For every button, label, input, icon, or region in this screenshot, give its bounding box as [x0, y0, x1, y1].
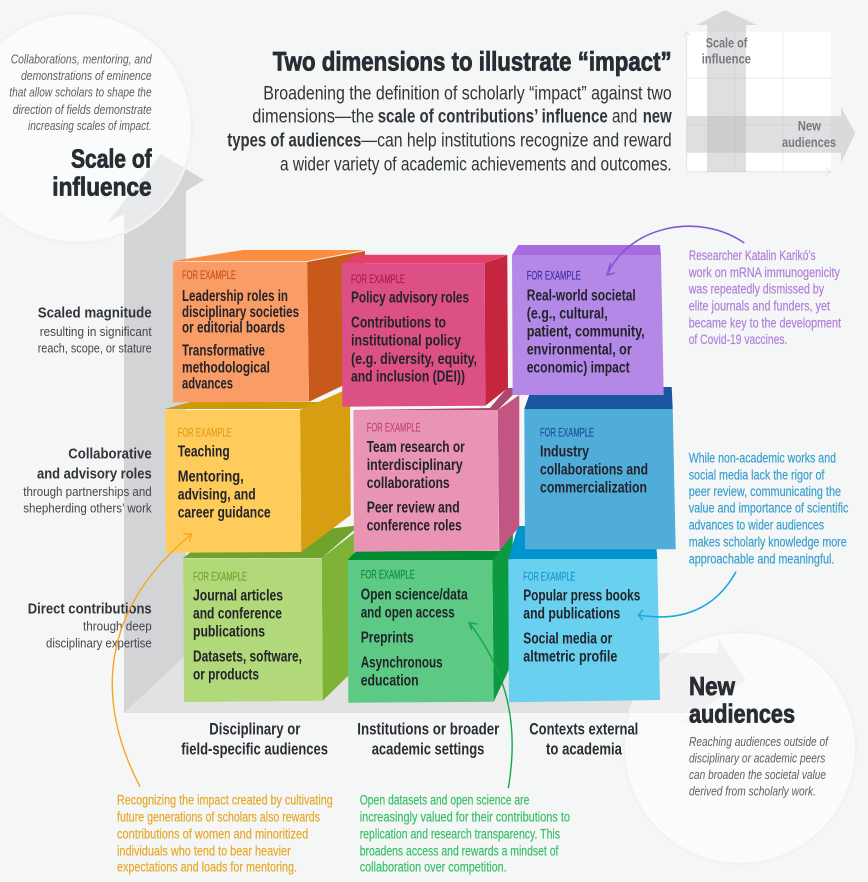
block: institutional collaborative roles: collaborations	[367, 475, 450, 492]
intro paragraph	[227, 83, 672, 176]
column label: disciplinary audiences: Disciplinary or	[209, 720, 301, 738]
column label: disciplinary audiences	[181, 720, 328, 758]
block: disciplinary direct contributions: and conference	[193, 606, 282, 623]
block: external collaborative roles	[524, 387, 676, 549]
block: disciplinary scaled magnitude: Leadership roles in	[182, 288, 288, 305]
mini diagram: two axes	[683, 10, 855, 175]
block: external scaled magnitude: environmental, or	[527, 342, 632, 359]
scale of influence description: increasing scales of impact.	[28, 119, 152, 133]
row label: scaled magnitude	[38, 305, 152, 356]
row label: scaled magnitude: resulting in significant	[40, 324, 152, 339]
block: external scaled magnitude: FOR EXAMPLE	[527, 270, 581, 282]
block: external direct contributions: Popular press books	[523, 588, 640, 605]
block: institutional collaborative roles: interdisciplinary	[367, 457, 463, 474]
mini diagram: two axes: audiences	[782, 134, 836, 150]
block: disciplinary direct contributions: or products	[193, 667, 259, 684]
column label: disciplinary audiences: field-specific audiences	[181, 740, 328, 758]
block: disciplinary scaled magnitude: methodological	[182, 359, 270, 376]
block: external collaborative roles: FOR EXAMPLE	[540, 428, 594, 440]
block: institutional direct contributions: FOR EXAMPLE	[361, 570, 415, 582]
row label: collaborative and advisory roles	[23, 445, 152, 516]
block: institutional direct contributions: and open access	[361, 605, 455, 622]
heading: new audiences: New	[689, 671, 736, 701]
annotation: Karikó	[688, 248, 841, 347]
title: Two dimensions to illustrate “impact”	[273, 47, 672, 77]
annotation: Karikó: elite journals and funders, yet	[689, 299, 830, 314]
block: institutional collaborative roles: FOR EXAMPLE	[367, 423, 421, 435]
block: disciplinary scaled magnitude	[173, 250, 365, 402]
intro paragraph: dimensions—the	[252, 107, 374, 128]
block: disciplinary scaled magnitude: or editorial boards	[182, 320, 285, 337]
block: external direct contributions: and publications	[523, 606, 620, 623]
intro paragraph: —can help institutions recognize and reward	[361, 131, 672, 152]
row label: collaborative and advisory roles: through partnerships and	[23, 484, 152, 499]
horizontal axis arrow: new audiences	[124, 640, 746, 726]
block: institutional collaborative roles: Team research or	[367, 439, 465, 456]
heading: new audiences: audiences	[689, 699, 795, 729]
block: external direct contributions: Social media or	[523, 631, 612, 648]
block: disciplinary collaborative roles: career guidance	[178, 505, 271, 522]
block: external scaled magnitude	[512, 245, 664, 395]
block: disciplinary scaled magnitude: Transformative	[182, 343, 265, 360]
scale of influence description: demonstrations of eminence	[21, 69, 152, 83]
arrow: blue annotation to popular press block	[638, 572, 736, 620]
block: disciplinary collaborative roles: FOR EXAMPLE	[178, 428, 232, 440]
vertical axis arrow: scale of influence	[107, 154, 204, 713]
heading: scale of influence: influence	[52, 172, 152, 202]
annotation: mentoring: expectations and loads for mentoring.	[117, 860, 297, 875]
intro paragraph: a wider variety of academic achievements and outcomes.	[280, 155, 672, 176]
annotation: mentoring	[117, 793, 333, 875]
new audiences description: derived from scholarly work.	[689, 785, 816, 799]
circle: new audiences backdrop	[624, 632, 856, 864]
scale of influence description: that allow scholars to shape the	[9, 86, 152, 100]
circle: scale of influence backdrop	[0, 13, 192, 243]
mini diagram: two axes: influence	[702, 50, 751, 66]
block: disciplinary collaborative roles	[165, 388, 351, 553]
block: institutional direct contributions: Asynchronous	[361, 655, 443, 672]
column label: institutions: academic settings	[372, 740, 484, 758]
block: institutional scaled magnitude	[342, 255, 508, 407]
row label: collaborative and advisory roles: shepherding others’ work	[23, 501, 152, 516]
block: disciplinary direct contributions: Datasets, software,	[193, 649, 302, 666]
block: disciplinary collaborative roles: Mentoring,	[178, 469, 244, 486]
block: institutional direct contributions: Open science/data	[361, 587, 468, 604]
block: institutional collaborative roles: conference roles	[367, 518, 462, 535]
annotation: open science: Open datasets and open science are	[360, 793, 529, 808]
intro paragraph: and	[612, 107, 637, 128]
block: external direct contributions: FOR EXAMPLE	[523, 572, 575, 584]
row label: scaled magnitude: reach, scope, or stature	[38, 341, 152, 356]
annotation: open science: collaboration over competition.	[360, 860, 507, 875]
annotation: Karikó: of Covid-19 vaccines.	[689, 332, 787, 347]
block: external scaled magnitude: economic) impact	[527, 360, 630, 377]
block: external collaborative roles: commercialization	[540, 480, 647, 497]
new audiences description	[689, 735, 829, 799]
arrow: purple annotation to real-world block	[607, 226, 744, 275]
annotation: mentoring: future generations of scholars also rewards	[117, 810, 320, 825]
block: disciplinary direct contributions: publications	[193, 624, 265, 641]
annotation: open science: increasingly valued for their contributions to	[360, 810, 570, 825]
intro paragraph: Broadening the definition of scholarly “impact” against two	[263, 83, 672, 104]
row label: direct contributions: through deep	[83, 619, 152, 634]
block: disciplinary scaled magnitude: disciplinary societies	[182, 304, 299, 321]
block: disciplinary direct contributions	[183, 525, 360, 702]
intro paragraph: types of audiences	[227, 131, 361, 152]
block: institutional scaled magnitude: Policy advisory roles	[351, 290, 469, 307]
block: external scaled magnitude: (e.g., cultural,	[527, 306, 608, 323]
column label: institutions	[357, 720, 500, 758]
annotation: non-academic works: social media lack the rigor of	[689, 468, 825, 483]
block: external collaborative roles: collaborations and	[540, 462, 648, 479]
row label: scaled magnitude: Scaled magnitude	[38, 305, 152, 322]
mini diagram: two axes: New	[798, 118, 821, 134]
block: institutional direct contributions	[348, 533, 513, 703]
annotation: open science: broadens access and rewards a mindset of	[360, 843, 559, 858]
block: external scaled magnitude: Real-world societal	[527, 288, 636, 305]
block: external collaborative roles: Industry	[540, 444, 589, 461]
block: disciplinary scaled magnitude: FOR EXAMPLE	[182, 270, 236, 282]
new audiences description: Reaching audiences outside of	[689, 735, 829, 749]
intro paragraph: scale of contributions’ influence	[378, 107, 608, 128]
block: disciplinary collaborative roles: advising, and	[178, 487, 256, 504]
row label: collaborative and advisory roles: and advisory roles	[37, 466, 152, 483]
annotation: mentoring: individuals who tend to bear heavier	[117, 843, 291, 858]
annotation: open science	[360, 793, 570, 875]
heading: new audiences	[689, 671, 795, 729]
annotation: non-academic works	[689, 451, 849, 566]
block: institutional scaled magnitude: and inclusion (DEI))	[351, 369, 465, 386]
block: disciplinary direct contributions: FOR EXAMPLE	[193, 572, 247, 584]
annotation: non-academic works: approachable and meaningful.	[689, 551, 834, 566]
annotation: non-academic works: advances to wider audiences	[689, 518, 824, 533]
intro paragraph: new	[643, 107, 672, 128]
block: disciplinary collaborative roles: Teaching	[178, 444, 230, 461]
annotation: Karikó: Researcher Katalin Karikó’s	[689, 248, 816, 263]
annotation: Karikó: was repeatedly dismissed by	[688, 282, 824, 297]
block: institutional scaled magnitude: institutional policy	[351, 333, 461, 350]
block: institutional collaborative roles: Peer review and	[367, 500, 460, 517]
arrow: orange annotation to teaching block	[112, 534, 192, 787]
annotation: mentoring: Recognizing the impact created by cultivating	[117, 793, 333, 808]
block: institutional direct contributions: Preprints	[361, 630, 414, 647]
scale of influence description: direction of fields demonstrate	[13, 103, 152, 117]
block: institutional direct contributions: education	[361, 673, 419, 690]
block: institutional collaborative roles	[353, 388, 519, 552]
column label: external contexts: to academia	[546, 740, 623, 758]
block: external direct contributions	[508, 526, 660, 702]
block: external direct contributions: altmetric profile	[523, 649, 618, 666]
scale of influence description	[9, 52, 153, 133]
block: institutional scaled magnitude: Contributions to	[351, 315, 446, 332]
heading: scale of influence	[52, 144, 152, 202]
block: disciplinary scaled magnitude: advances	[182, 376, 233, 393]
block: institutional scaled magnitude: FOR EXAMPLE	[351, 274, 405, 286]
new audiences description: can broaden the societal value	[689, 768, 826, 782]
new audiences description: disciplinary or academic peers	[689, 751, 825, 765]
block: disciplinary direct contributions: Journal articles	[193, 588, 283, 605]
heading: scale of influence: Scale of	[71, 144, 152, 174]
arrow: green annotation to open science block	[469, 623, 512, 788]
block: institutional scaled magnitude: (e.g. diversity, equity,	[351, 351, 477, 368]
mini diagram: two axes: Scale of	[706, 34, 748, 50]
annotation: mentoring: contributions of women and minoritized	[117, 827, 308, 842]
row label: collaborative and advisory roles: Collaborative	[68, 445, 152, 462]
scale of influence description: Collaborations, mentoring, and	[11, 52, 153, 66]
column label: external contexts	[529, 720, 638, 758]
row label: direct contributions	[28, 600, 152, 650]
column label: institutions: Institutions or broader	[357, 720, 500, 738]
column label: external contexts: Contexts external	[529, 720, 638, 738]
block: external scaled magnitude: patient, community,	[527, 324, 645, 341]
annotation: open science: replication and research transparency. This	[360, 826, 560, 841]
row label: direct contributions: Direct contributions	[28, 600, 152, 617]
row label: direct contributions: disciplinary expertise	[46, 635, 152, 650]
